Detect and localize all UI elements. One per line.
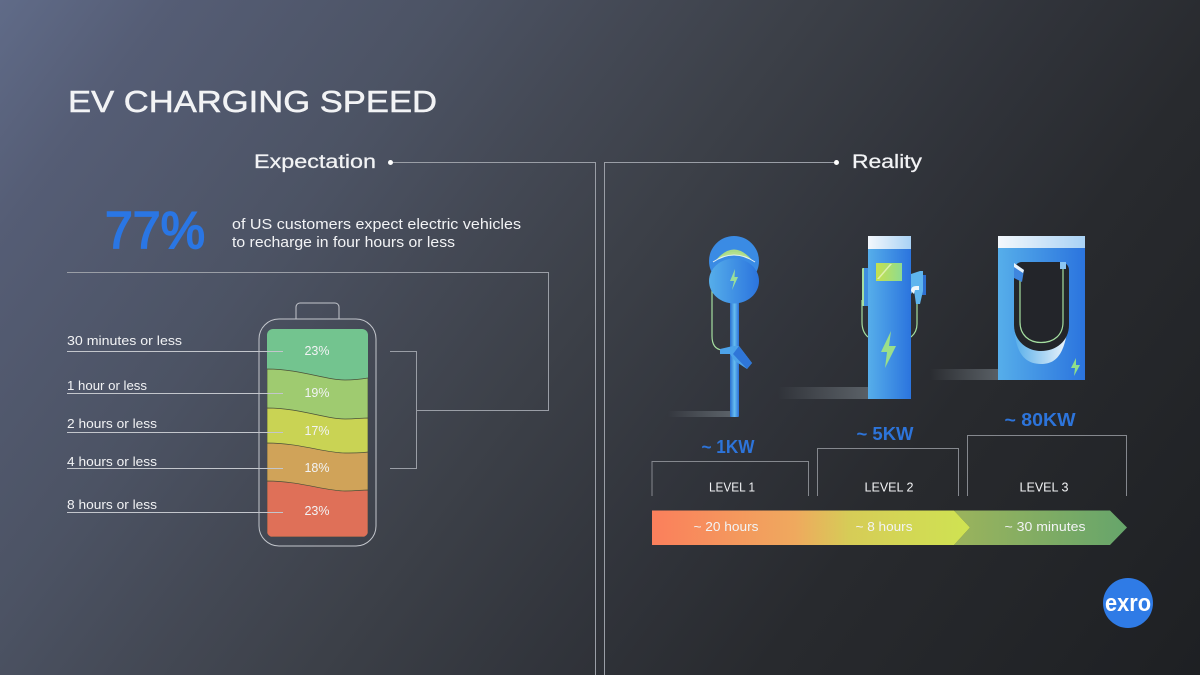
charging time arrow: ~ 30 minutes [1004,520,1086,534]
time labels with leader lines: 8 hours or less [67,497,158,512]
battery outline [259,303,376,546]
text block: customer expectation: to recharge in four hours or less [232,235,455,251]
power label: level 1: ~ 1KW [702,437,755,457]
level 1 box [652,462,808,496]
title: EV CHARGING SPEED [68,84,437,119]
heading: expectation [254,152,596,675]
segment labels: 19% [304,386,330,400]
segment labels: 23% [304,504,330,518]
text block: customer expectation: of US customers expect electric vehicles [232,217,521,233]
heading: expectation: Expectation [254,152,376,173]
time labels with leader lines: 30 minutes or less [67,333,183,348]
charging time arrow [652,510,1127,545]
segment labels: 18% [304,461,330,475]
connector: statistic to bracket [67,272,548,410]
logo: Exro: exro [1105,590,1151,617]
charging time arrow: ~ 20 hours [694,520,758,534]
level 3 box: LEVEL 3 [1020,480,1068,494]
heading: reality: Reality [852,152,923,173]
segment labels [304,344,330,518]
time labels with leader lines [67,333,283,512]
icon: level 1 charger [668,236,759,417]
time labels with leader lines: 1 hour or less [67,378,148,393]
level 3 box [968,436,1126,496]
charging time arrow: ~ 8 hours [856,520,912,534]
power label: level 3: ~ 80KW [1004,410,1076,430]
power label: level 2: ~ 5KW [856,424,914,444]
segment labels: 23% [304,344,330,358]
bracket [390,352,416,468]
text block: customer expectation [232,217,521,251]
level 2 box [818,448,958,496]
time labels with leader lines: 4 hours or less [67,454,158,469]
battery segments [267,329,368,537]
segment labels: 17% [304,424,330,438]
battery chart [259,303,376,546]
icon: level 3 charger [930,236,1085,380]
heading: reality [604,152,923,675]
statistic: 77%: 77% [105,202,205,260]
time labels with leader lines: 2 hours or less [67,416,158,431]
logo: Exro [1103,578,1153,628]
icon: level 2 charger [778,236,926,399]
level 2 box: LEVEL 2 [864,480,914,494]
level 1 box: LEVEL 1 [709,480,755,494]
